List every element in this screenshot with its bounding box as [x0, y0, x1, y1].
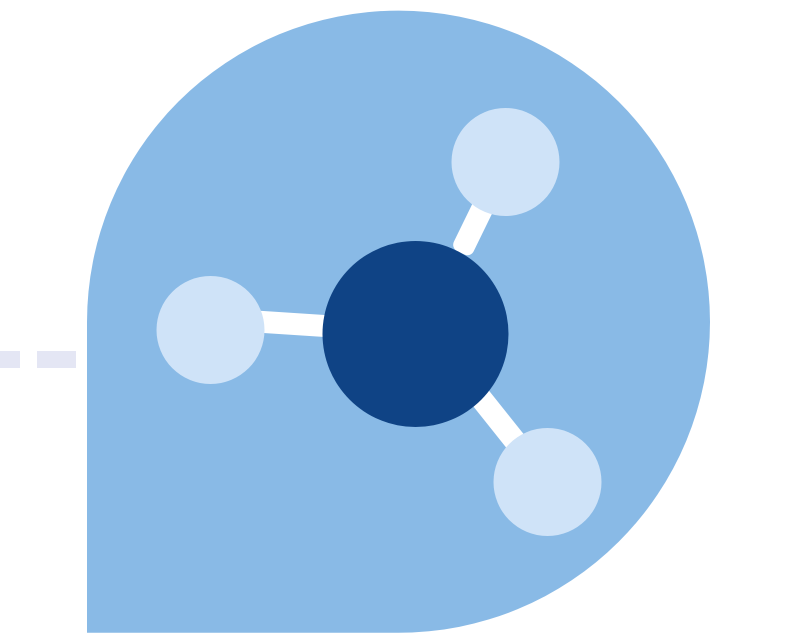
outer atom: top right	[452, 108, 560, 216]
teardrop background panel	[87, 11, 710, 633]
outer atom: bottom right	[494, 428, 602, 536]
dashed line segments	[0, 351, 76, 368]
bond: left atom	[211, 308, 400, 342]
bond: bottom right atom	[451, 365, 556, 488]
central atom	[322, 241, 508, 427]
bond: top right atom	[451, 157, 515, 258]
molecule bonds	[211, 157, 556, 488]
outer atom: left	[156, 276, 264, 384]
